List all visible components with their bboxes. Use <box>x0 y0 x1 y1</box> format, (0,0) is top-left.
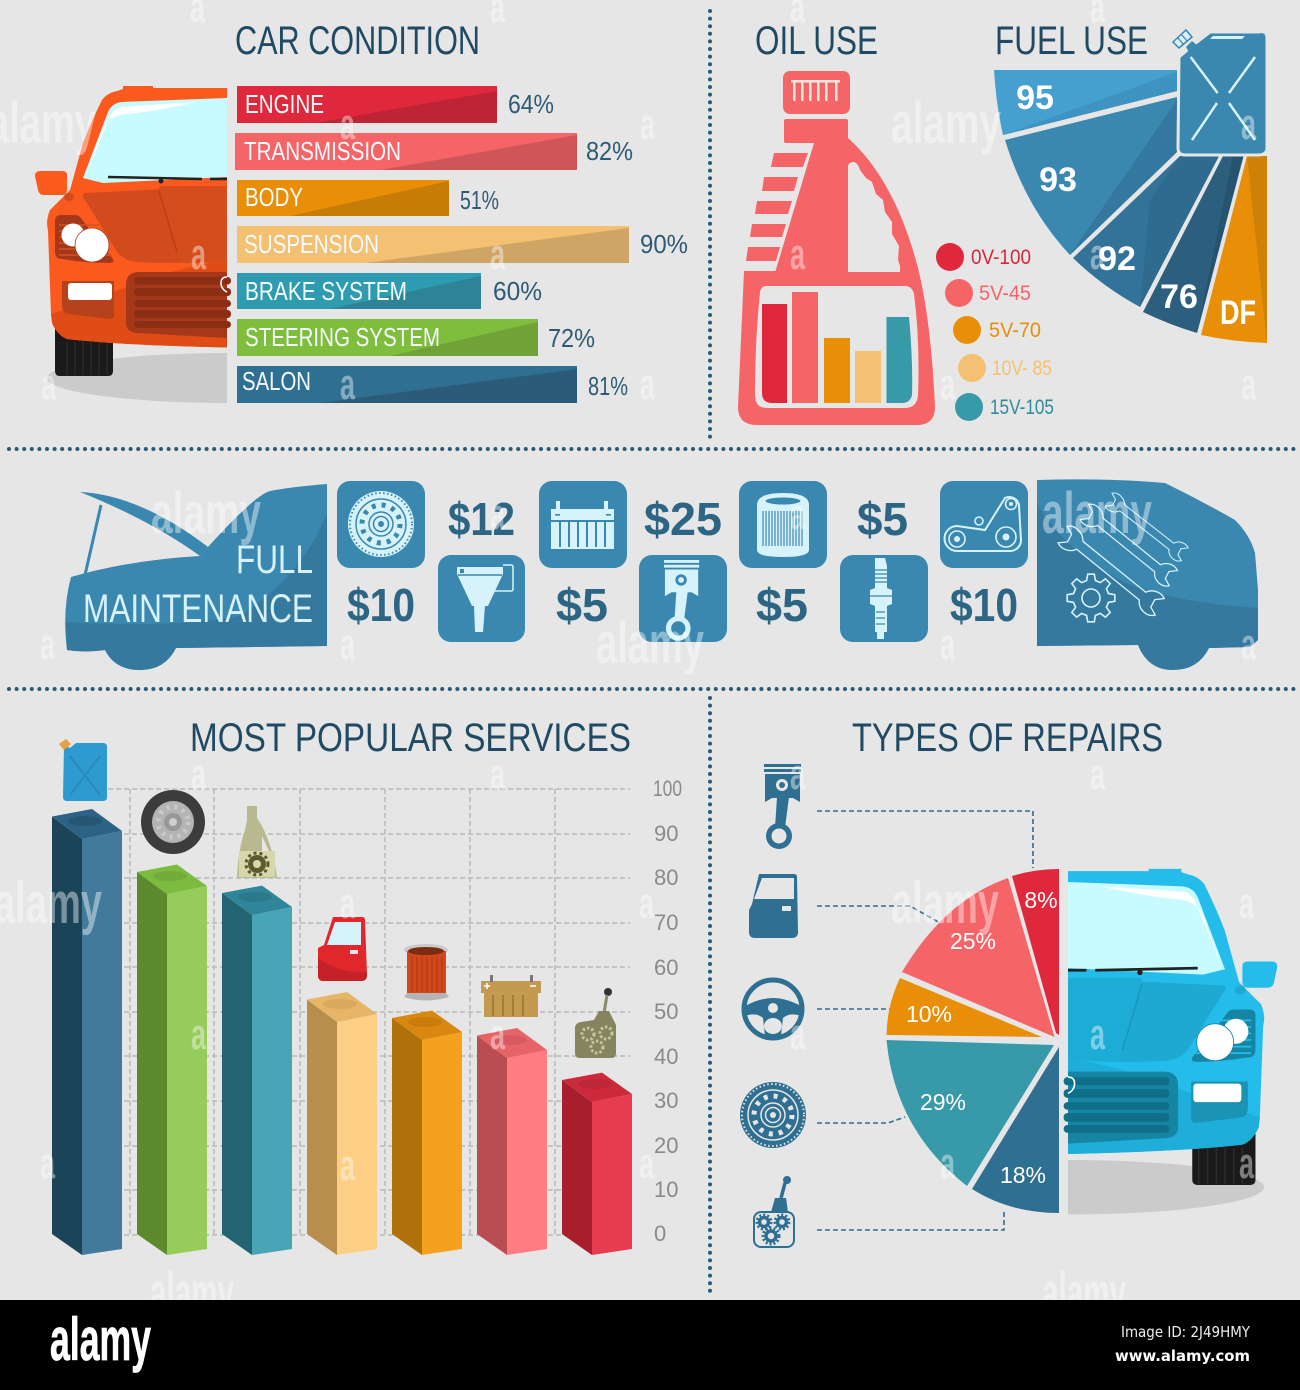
slice: 8% <box>1012 869 1059 1035</box>
chart: fuel fan: 93 <box>1039 161 1077 199</box>
prices: $10 <box>347 579 415 631</box>
tile: spark plug <box>840 555 928 642</box>
legend: oil grades <box>936 243 1054 421</box>
tile: funnel <box>438 555 525 642</box>
heading: fuel use: FUEL USE <box>995 19 1148 63</box>
bar: body: 51% <box>460 185 499 215</box>
slice: 29% <box>886 1040 1054 1186</box>
axis labels: 100 <box>653 776 682 801</box>
footer logo: alamy <box>50 1306 151 1373</box>
watermarks: alamy <box>151 481 261 546</box>
heading: car condition: CAR CONDITION <box>235 19 480 63</box>
icon: gearbox <box>754 1176 794 1247</box>
bar: transmission <box>235 133 633 170</box>
panel: full maintenance <box>65 479 1258 670</box>
3D bar: fuel <box>52 809 122 1255</box>
bar: salon <box>237 366 628 403</box>
bar: suspension: 90% <box>640 229 688 259</box>
axis labels: 0 <box>654 1221 666 1246</box>
icon: car front with raised hood <box>65 484 327 670</box>
icon: oil bottle small <box>237 806 277 878</box>
tile: tire <box>337 481 425 568</box>
watermarks: a <box>940 620 955 669</box>
bar: suspension <box>237 226 688 263</box>
watermarks: a <box>639 879 654 928</box>
label: full maintenance: MAINTENANCE <box>83 587 313 631</box>
3D bar: filters <box>392 1010 462 1255</box>
axis labels: 50 <box>654 999 678 1024</box>
slice: 29%: 29% <box>920 1089 966 1115</box>
watermarks: alamy <box>596 611 704 676</box>
bar: steering system: 72% <box>548 323 595 353</box>
watermarks: a <box>1241 620 1256 669</box>
slice: 8%: 8% <box>1024 887 1058 913</box>
watermarks: a <box>1239 879 1254 928</box>
3D bar: tires <box>137 864 207 1255</box>
chart: fuel fan: 76 <box>1160 278 1198 316</box>
axis labels: 60 <box>654 955 678 980</box>
bar: transmission: 82% <box>586 136 633 166</box>
watermarks: a <box>790 1010 805 1059</box>
axis labels <box>653 776 682 1246</box>
slice: 18% <box>972 1047 1059 1213</box>
bar: steering system <box>237 319 595 356</box>
watermarks: a <box>1241 360 1256 409</box>
panel: car condition <box>35 19 688 403</box>
icon: blue fuel can <box>59 739 107 801</box>
icon: red car door <box>318 917 367 981</box>
slice: 10%: 10% <box>906 1001 952 1027</box>
watermarks: a <box>340 879 355 928</box>
watermarks: alamy <box>1042 1261 1126 1326</box>
chart: fuel fan: 92 <box>1098 240 1136 278</box>
watermarks: a <box>1241 100 1256 149</box>
watermarks: a <box>490 1010 505 1059</box>
bar: steering system: STEERING SYSTEM <box>245 322 440 352</box>
bar: salon: 81% <box>588 371 628 401</box>
panel: most popular services <box>52 716 682 1255</box>
heading: types of repairs: TYPES OF REPAIRS <box>852 716 1163 760</box>
watermarks: a <box>940 360 955 409</box>
bar: brake system <box>237 273 542 309</box>
bar: engine: 64% <box>508 89 554 119</box>
prices: $5 <box>756 579 808 631</box>
bar: brake system: BRAKE SYSTEM <box>245 276 407 306</box>
watermarks: a <box>340 1141 355 1190</box>
icon: red oil filter <box>404 944 449 1000</box>
watermarks: alamy <box>891 871 999 936</box>
3D bar: transmission <box>562 1073 632 1255</box>
heading: oil use: OIL USE <box>755 19 878 63</box>
watermarks: a <box>41 360 56 409</box>
bar: brake system: 60% <box>493 276 542 306</box>
pie chart: types of repairs <box>886 869 1059 1213</box>
legend: oil grades: 15V-105 <box>990 396 1054 419</box>
slice: 25%: 25% <box>950 928 996 954</box>
icon: tan battery <box>481 975 541 1017</box>
prices: $5 <box>556 579 608 631</box>
watermarks: a <box>191 230 206 279</box>
3D bar: body <box>307 992 377 1255</box>
icon: blue car front half <box>1064 869 1277 1214</box>
slice: 10% <box>886 978 1042 1037</box>
icon: piston <box>764 764 801 849</box>
icon: oil bottle with bars <box>738 71 935 425</box>
axis labels: 20 <box>654 1133 678 1158</box>
prices <box>347 493 1018 631</box>
prices: $5 <box>857 493 908 545</box>
3D bar: batteries <box>477 1028 547 1255</box>
bar: body: BODY <box>245 182 303 212</box>
tile: piston <box>639 555 727 642</box>
axis labels: 30 <box>654 1088 678 1113</box>
tile: battery <box>539 481 627 568</box>
watermarks: a <box>640 360 655 409</box>
tile: oil filter <box>739 481 827 568</box>
watermarks: a <box>490 490 505 539</box>
watermarks: alamy <box>891 91 1001 156</box>
footer bar <box>0 1300 1300 1390</box>
watermarks: a <box>1090 750 1105 799</box>
icon: door <box>749 874 798 938</box>
label: full maintenance <box>83 538 313 631</box>
image id: Image ID: 2J49HMY <box>1121 1323 1251 1341</box>
bar: suspension: SUSPENSION <box>244 229 379 259</box>
prices: $25 <box>644 493 722 545</box>
tile: belt drive <box>940 481 1028 568</box>
bar: body <box>237 180 499 216</box>
panel: oil use <box>738 19 1054 425</box>
icon: tire <box>740 1082 806 1148</box>
icon: steering wheel <box>744 980 802 1038</box>
legend: oil grades: 5V-70 <box>989 319 1041 342</box>
axis labels: 80 <box>654 865 678 890</box>
website: www.alamy.com <box>1115 1347 1250 1365</box>
chart: fuel fan <box>994 70 1267 343</box>
bar: salon: SALON <box>242 366 311 396</box>
watermarks: a <box>1090 1010 1105 1059</box>
icon: red car front half <box>35 86 231 403</box>
heading: most popular services: MOST POPULAR SERVICES <box>190 716 631 760</box>
3D bar: oil <box>222 886 292 1255</box>
axis labels: 70 <box>654 910 678 935</box>
slice: 18%: 18% <box>1000 1162 1046 1188</box>
watermarks: a <box>340 100 355 149</box>
watermarks: a <box>639 1139 654 1188</box>
watermarks: a <box>191 1010 206 1059</box>
chart: fuel fan: 95 <box>1016 79 1054 117</box>
axis labels: 90 <box>654 821 678 846</box>
slice: 25% <box>902 878 1054 1037</box>
bar chart: car condition <box>235 86 688 403</box>
icon: tire <box>141 790 205 854</box>
legend: oil grades: 5V-45 <box>979 282 1031 305</box>
icon: jerrycan <box>1173 30 1267 155</box>
watermarks: a <box>340 360 355 409</box>
legend: oil grades: 0V-100 <box>971 246 1031 269</box>
watermarks: alamy <box>150 1261 234 1326</box>
bar: transmission: TRANSMISSION <box>244 136 401 166</box>
chart: fuel fan: DF <box>1220 294 1256 332</box>
icon: gear shifter <box>575 988 616 1058</box>
watermarks: alamy <box>1042 481 1152 546</box>
axis labels: 10 <box>654 1177 678 1202</box>
panel: fuel use <box>994 19 1267 343</box>
watermarks: a <box>640 100 655 149</box>
axis labels: 40 <box>654 1044 678 1069</box>
label: full maintenance: FULL <box>236 538 313 582</box>
watermarks: a <box>790 750 805 799</box>
prices: $12 <box>448 493 515 545</box>
icon: van rear with wrenches <box>1037 479 1258 670</box>
watermarks: a <box>940 1139 955 1188</box>
watermarks: a <box>1090 230 1105 279</box>
watermarks: a <box>490 230 505 279</box>
panel: types of repairs <box>740 716 1277 1247</box>
watermarks: a <box>490 750 505 799</box>
watermarks: a <box>790 490 805 539</box>
watermarks: a <box>191 750 206 799</box>
prices: $10 <box>950 579 1018 631</box>
watermarks: a <box>790 230 805 279</box>
bar: engine: ENGINE <box>245 89 324 119</box>
watermarks: a <box>340 620 355 669</box>
watermarks: a <box>40 620 55 669</box>
bar: engine <box>237 86 554 123</box>
legend: oil grades: 10V- 85 <box>992 357 1052 380</box>
watermarks: a <box>40 1139 55 1188</box>
watermarks: a <box>1239 1139 1254 1188</box>
